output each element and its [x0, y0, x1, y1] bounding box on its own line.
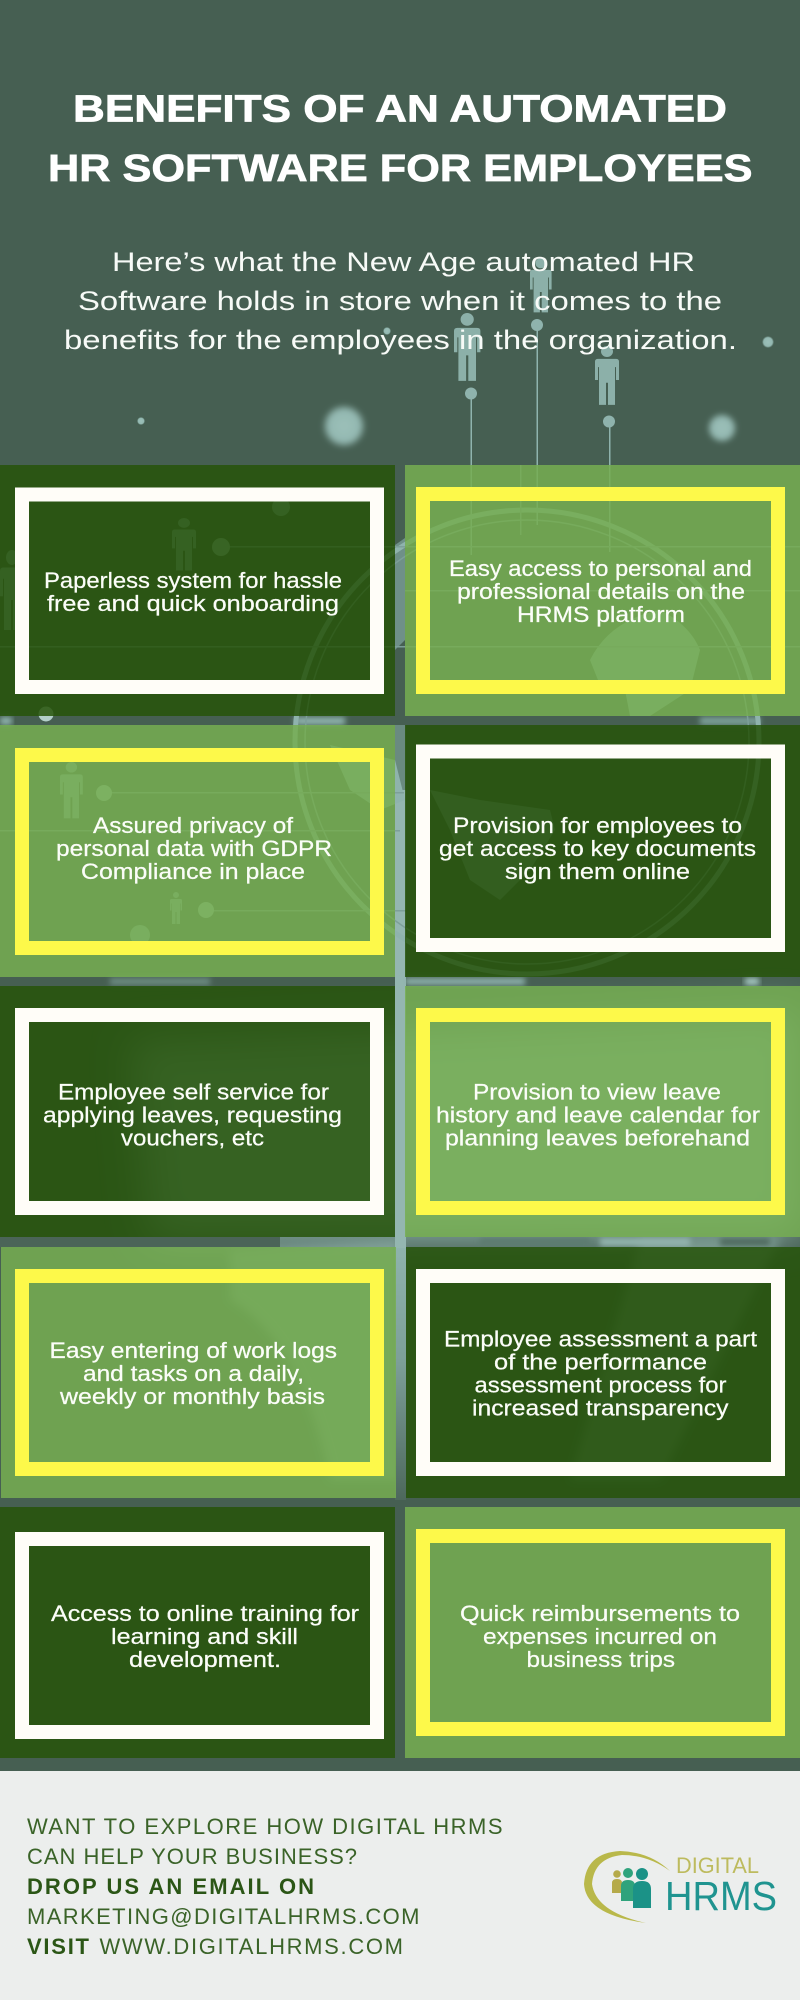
network line to first person: [470, 395, 472, 555]
globe inner ring: [305, 520, 749, 964]
horizontal network line: [104, 792, 404, 794]
gap dark far right: [720, 1238, 770, 1246]
call to action text: [27, 1814, 502, 1959]
card text: [439, 813, 756, 884]
card text: and tasks on a daily,: [83, 1361, 304, 1386]
network line to third person: [609, 422, 610, 552]
panel: paperless system: [0, 465, 395, 716]
person figure 1: [454, 313, 480, 381]
network node: [212, 538, 230, 556]
vertical bright gap third row: [395, 790, 406, 1250]
continent: North America: [330, 745, 405, 810]
logo: Digital HRMS: [584, 1851, 777, 1923]
footer panel: [0, 1771, 800, 2000]
call to action text: WANT TO EXPLORE HOW DIGITAL HRMS: [27, 1814, 502, 1839]
card text: Provision to view leave: [473, 1080, 721, 1104]
horizontal network line: [0, 646, 800, 648]
card text: sign them online: [505, 859, 690, 884]
card text: get access to key documents: [439, 836, 756, 861]
card text: professional details on the: [457, 579, 745, 604]
glowing dot small left: [137, 417, 145, 425]
card text: increased transparency: [472, 1396, 728, 1420]
card text: vouchers, etc: [121, 1126, 264, 1150]
panel: key documents: [405, 725, 800, 977]
gap streaks first row: [395, 538, 405, 650]
card text: Employee assessment a part: [444, 1326, 757, 1352]
card text: [460, 1601, 740, 1672]
card text: free and quick onboarding: [47, 591, 339, 616]
subtitle: [64, 247, 737, 355]
horizontal network line: [206, 910, 406, 912]
person figure 7: [170, 892, 182, 924]
person figure 2: [530, 258, 552, 312]
gap highlight row two to three right: [405, 978, 525, 985]
card text: weekly or monthly basis: [59, 1384, 325, 1409]
panel: assured privacy: [0, 725, 395, 977]
network node at gap: [38, 706, 54, 722]
panel: self service: [0, 986, 395, 1237]
card text: personal data with GDPR: [56, 836, 332, 861]
network line to second person: [536, 325, 538, 525]
logo wordmark DIGITAL: DIGITAL: [676, 1853, 759, 1878]
panel: reimbursements: [405, 1507, 800, 1758]
continent: Africa: [590, 610, 700, 716]
title: [48, 88, 752, 190]
network node: [130, 925, 150, 945]
call to action text: DROP US AN EMAIL ON: [27, 1874, 314, 1899]
glowing dot small right: [762, 336, 774, 348]
network node: [465, 388, 477, 400]
glowing dot by subtitle: [383, 327, 391, 335]
gap highlight row three to four dark: [480, 1238, 590, 1246]
network node: [603, 416, 615, 428]
network node: [272, 498, 290, 516]
glowing dot right: [707, 413, 737, 443]
soft light area behind third row: [130, 1010, 800, 1240]
diagonal swoosh lower right: [570, 1238, 780, 1480]
gap highlight row one to two right: [700, 717, 760, 725]
network node: [531, 319, 543, 331]
card text: learning and skill: [111, 1624, 298, 1649]
panel: employee assessment: [406, 1247, 800, 1498]
subtitle: Here’s what the New Age automated HR: [112, 247, 695, 277]
card text: business trips: [526, 1647, 675, 1672]
gap highlight row two to three: [110, 978, 210, 985]
card text: Quick reimbursements to: [460, 1601, 740, 1626]
person figure 5: [0, 550, 24, 630]
gap highlight row one to two centre: [295, 717, 345, 725]
title: HR SOFTWARE FOR EMPLOYEES: [48, 148, 752, 190]
call to action text: CAN HELP YOUR BUSINESS?: [27, 1844, 357, 1869]
panel: online training: [0, 1507, 395, 1758]
card text: Easy entering of work logs: [50, 1338, 337, 1363]
card text: assessment process for: [474, 1372, 726, 1398]
card text: planning leaves beforehand: [445, 1126, 750, 1150]
card text: history and leave calendar for: [436, 1102, 760, 1128]
card text: [43, 1080, 342, 1150]
card text: Employee self service for: [58, 1080, 329, 1104]
call to action text: WWW.DIGITALHRMS.COM: [100, 1934, 403, 1959]
network node: [96, 785, 112, 801]
glowing dot large: [322, 404, 366, 448]
card text: [50, 1338, 337, 1409]
card text: expenses incurred on: [483, 1624, 717, 1649]
vertical gap fading down: [395, 1248, 406, 1500]
panel: easy access: [405, 465, 800, 716]
person figure 4: [172, 518, 196, 570]
card text: Provision for employees to: [453, 813, 742, 838]
subtitle: Software holds in store when it comes to the: [78, 286, 722, 316]
globe outline: [295, 510, 759, 974]
continent: South America: [430, 790, 555, 900]
card text: applying leaves, requesting: [43, 1102, 342, 1128]
left edge gap area: [0, 1237, 280, 1247]
card text: [51, 1601, 359, 1672]
logo swoosh: [584, 1851, 670, 1923]
horizontal grid line right: [405, 590, 800, 592]
background imagery: people, network and globe: [0, 258, 800, 1500]
card text: HRMS platform: [517, 602, 685, 627]
card text: Easy access to personal and: [449, 556, 752, 581]
card text: development.: [129, 1647, 281, 1672]
panel: work logs: [1, 1247, 396, 1498]
subtitle: benefits for the employees in the organization.: [64, 325, 737, 355]
card text: [44, 568, 342, 616]
card text: Assured privacy of: [93, 813, 294, 838]
call to action text: MARKETING@DIGITALHRMS.COM: [27, 1904, 420, 1929]
network node: [198, 902, 214, 918]
call to action text: VISIT: [27, 1934, 90, 1959]
gap highlight row two to three far right: [745, 978, 759, 985]
card text: [56, 813, 332, 884]
logo people: [612, 1868, 651, 1908]
vertical grid line: [520, 465, 522, 535]
card text: Paperless system for hassle: [44, 568, 342, 593]
light swoosh behind fourth row: [230, 1240, 400, 1480]
gap highlight row three to four: [600, 1238, 690, 1246]
card text: [449, 556, 752, 627]
vertical gap between rows one and two: [395, 725, 406, 790]
gap highlight row one to two left: [0, 717, 12, 725]
horizontal network line: [221, 546, 800, 548]
horizontal network line: [0, 830, 400, 832]
card text: Access to online training for: [51, 1601, 359, 1626]
card text: [444, 1326, 757, 1420]
person figure 3: [595, 346, 619, 405]
panel: leave history: [405, 986, 800, 1237]
title: BENEFITS OF AN AUTOMATED: [73, 88, 727, 130]
card text: [436, 1080, 760, 1150]
card text: of the performance: [494, 1350, 707, 1374]
logo wordmark HRMS: HRMS: [665, 1873, 777, 1919]
card text: Compliance in place: [81, 859, 305, 884]
person figure 6: [60, 762, 83, 818]
